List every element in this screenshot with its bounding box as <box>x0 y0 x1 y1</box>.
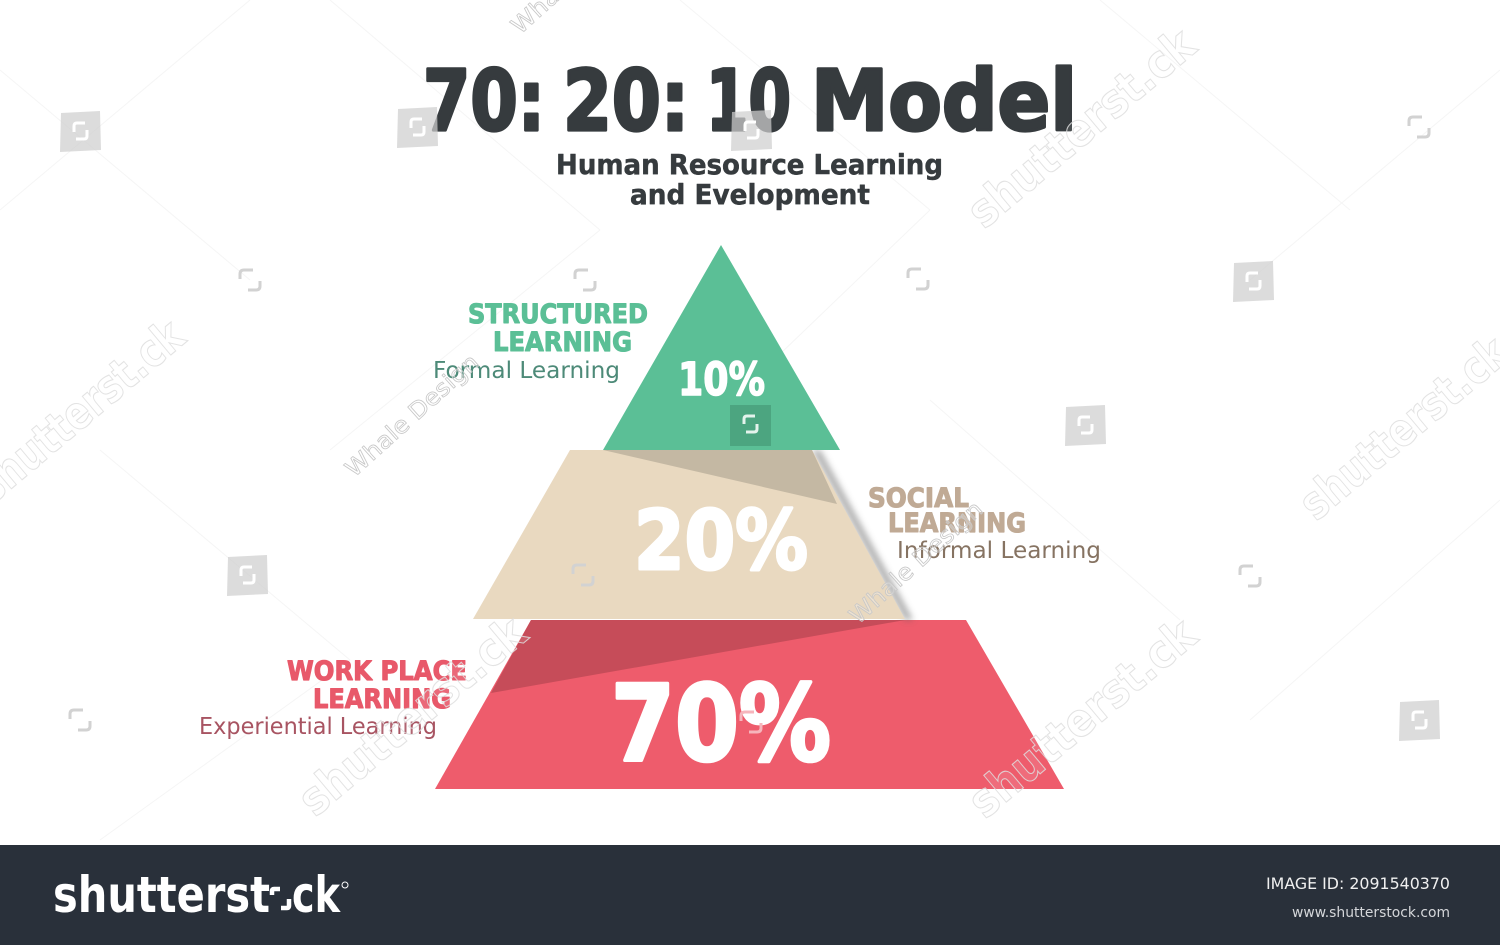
tier: 70% workplace learning: 70% <box>611 663 831 785</box>
title: 10 <box>706 52 791 150</box>
tier: 20% social learning: 20% <box>634 494 808 589</box>
watermark overlay: Whale Design <box>845 496 988 629</box>
website: www.shutterstock.com <box>1292 905 1450 921</box>
shutterstock logo: shutterst <box>53 866 270 924</box>
label: structured learning: STRUCTURED <box>468 299 648 330</box>
subtitle: Human Resource Learning <box>556 148 943 181</box>
tier: 10% structured learning: 10% <box>678 353 765 406</box>
watermark overlay: Whale Design <box>341 349 484 482</box>
image id: IMAGE ID: 2091540370 <box>1266 874 1450 893</box>
footer bar <box>0 845 1500 945</box>
title: 20: <box>563 52 689 150</box>
shadow of middle tier <box>812 450 913 620</box>
subtitle <box>556 148 943 211</box>
label: work place learning: WORK PLACE <box>287 656 467 687</box>
pyramid <box>435 245 1064 789</box>
label: structured learning: Formal Learning <box>433 358 620 384</box>
title: Model <box>811 52 1077 150</box>
title: 70: <box>423 52 545 150</box>
shutterstock logo: ck <box>292 866 341 924</box>
label: work place learning: LEARNING <box>313 684 451 715</box>
label: social learning: Informal Learning <box>897 538 1101 564</box>
tier: 70% workplace learning <box>435 620 1064 789</box>
label: structured learning <box>433 299 648 384</box>
subtitle: and Evelopment <box>630 178 870 211</box>
label: social learning: SOCIAL <box>868 483 969 514</box>
watermark overlay: shutterst.ck <box>287 604 538 826</box>
label: social learning: LEARNING <box>888 508 1026 539</box>
tier: 20% social learning <box>473 450 905 619</box>
tier: 10% structured learning <box>603 245 840 450</box>
title <box>423 52 1077 150</box>
label: structured learning: LEARNING <box>493 327 632 358</box>
watermark overlay: shutterst.ck <box>956 16 1207 238</box>
label: work place learning: Experiential Learning <box>199 714 437 740</box>
label: work place learning <box>199 656 467 740</box>
label: social learning <box>868 483 1101 564</box>
watermark overlay: shutterst.ck <box>957 606 1208 828</box>
